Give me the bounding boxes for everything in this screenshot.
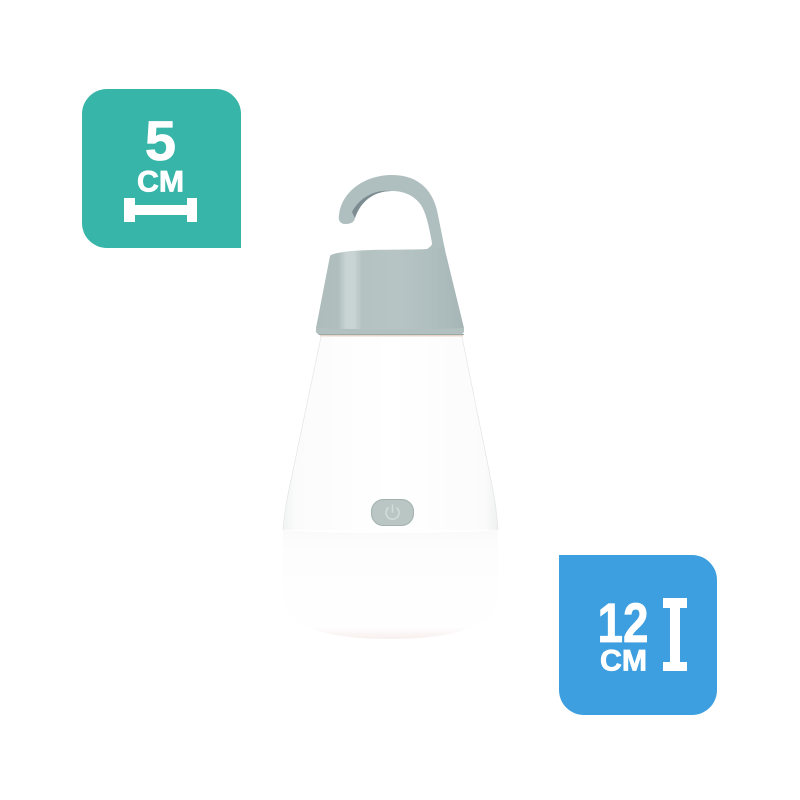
lamp cap [316, 246, 464, 336]
width unit: CM [137, 166, 184, 198]
lamp product photo [283, 175, 498, 639]
power button [371, 499, 414, 526]
lamp base [283, 530, 498, 639]
width value: 5 [145, 109, 176, 172]
lamp translucent body [283, 337, 498, 530]
icon: power symbol [386, 505, 399, 519]
height value: 12 [598, 591, 648, 654]
height badge: 12 cm [559, 555, 717, 715]
icon: vertical height bar [663, 598, 687, 671]
width badge: 5 cm [82, 89, 241, 248]
height unit: CM [600, 644, 647, 678]
icon: horizontal width bar [124, 198, 197, 222]
lamp hook [339, 175, 445, 251]
